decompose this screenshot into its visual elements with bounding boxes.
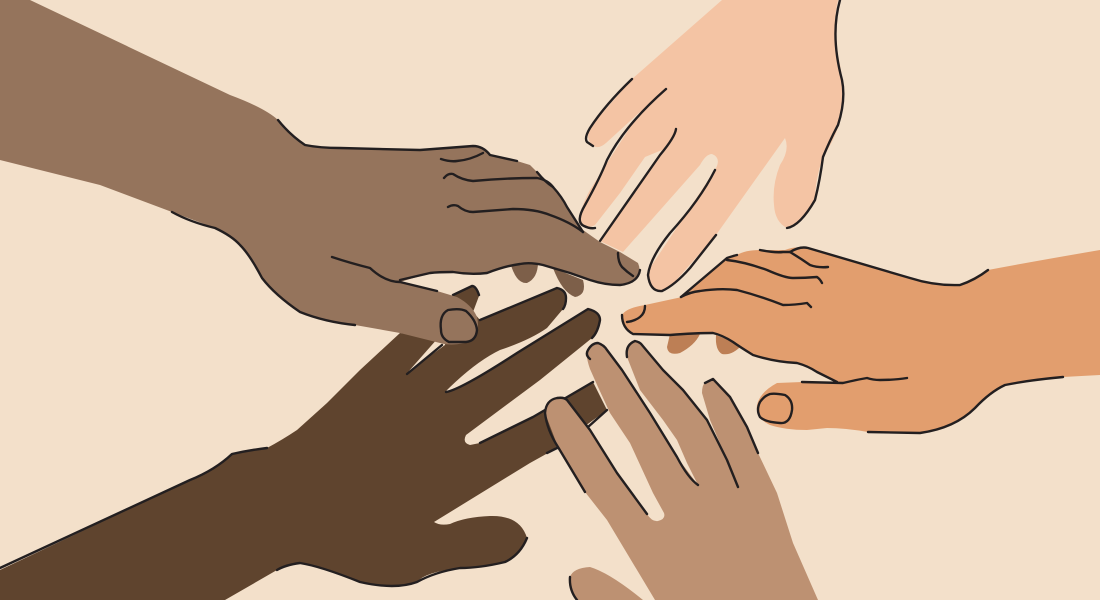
thumbnail (441, 309, 477, 342)
peach hand outlines (580, 0, 843, 291)
thumbnail (758, 394, 792, 423)
hand: medium brown from upper left (0, 0, 640, 344)
tan thumb (570, 567, 643, 600)
dark hand outlines (0, 286, 607, 586)
hand: peach from top (580, 0, 843, 291)
brown hand fill (0, 0, 640, 344)
hand: tan from bottom (545, 341, 818, 600)
brown hand outlines (172, 120, 640, 342)
hand: dark brown from lower left (0, 286, 607, 600)
curled fingers behind (510, 262, 538, 283)
curled fingers behind (667, 334, 700, 354)
tan hand outlines (545, 341, 758, 600)
orange hand fill (622, 247, 1100, 433)
hand: orange from right (622, 247, 1100, 433)
orange hand outlines (622, 248, 1063, 433)
